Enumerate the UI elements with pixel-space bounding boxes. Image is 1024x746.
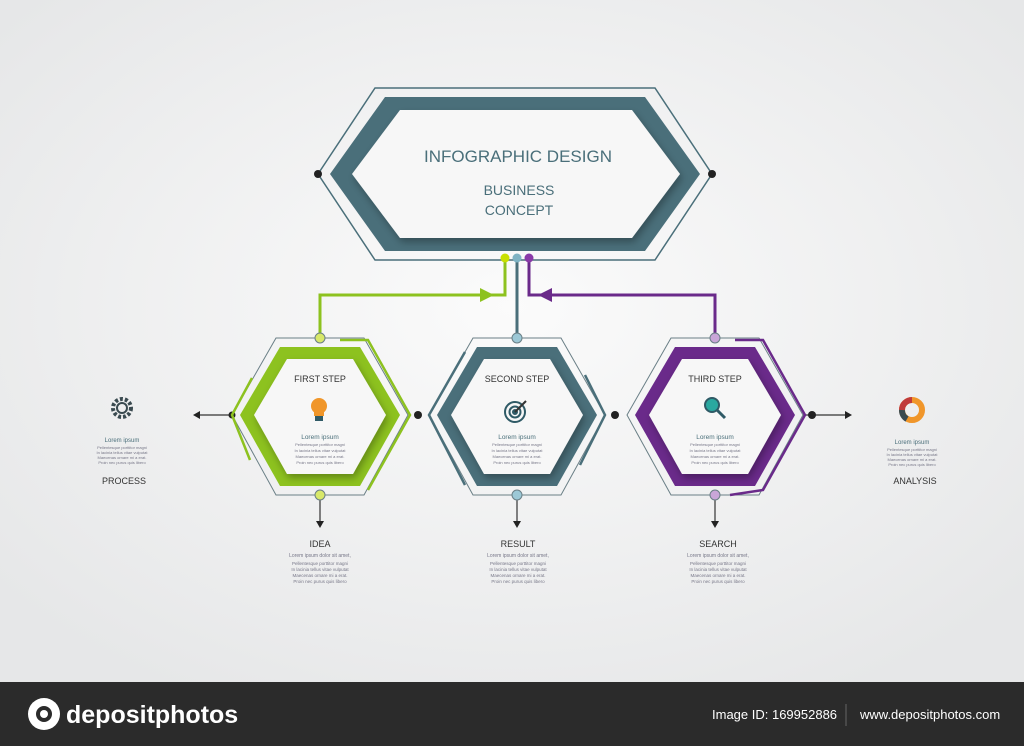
step 1 hexagon: Pellentesque porttitor magni <box>295 442 345 447</box>
bottom labels: Proin nec purus quis libero <box>691 579 745 584</box>
left side: process: In lacinia tellus vitae vulputat <box>97 450 148 455</box>
step 1 hexagon: In lacinia tellus vitae vulputat <box>295 448 346 453</box>
bottom labels: RESULT <box>501 539 536 549</box>
step 1 hexagon: Proin nec purus quis libero <box>296 460 344 465</box>
connector lines from title to steps <box>320 258 715 334</box>
step 3 hexagon: Proin nec purus quis libero <box>691 460 739 465</box>
left side: process: PROCESS <box>102 476 146 486</box>
bottom labels: Maecenas ornare mi a erat. <box>690 573 746 578</box>
step 2 hexagon: Proin nec purus quis libero <box>493 460 541 465</box>
bottom labels: Lorem ipsum dolor sit amet, <box>289 553 351 559</box>
bottom labels: Maecenas ornare mi a erat. <box>490 573 546 578</box>
step 2 hexagon: In lacinia tellus vitae vulputat <box>492 448 543 453</box>
icon: magnifier <box>705 398 725 418</box>
step 3 hexagon: In lacinia tellus vitae vulputat <box>690 448 741 453</box>
step 1 hexagon: FIRST STEP <box>294 374 346 384</box>
bottom labels: In lacinia tellus vitae vulputat <box>689 567 747 572</box>
right side: analysis: Proin nec purus quis libero <box>888 462 936 467</box>
bottom labels: Pellentesque porttitor magni <box>490 561 546 566</box>
bottom labels: Proin nec purus quis libero <box>491 579 545 584</box>
left side: process: Lorem ipsum <box>105 438 139 444</box>
bottom labels: Proin nec purus quis libero <box>293 579 347 584</box>
step 2 hexagon <box>429 333 605 500</box>
icon: target <box>505 401 526 422</box>
bottom labels: In lacinia tellus vitae vulputat <box>291 567 349 572</box>
right side: analysis: Maecenas ornare mi a erat. <box>888 457 936 462</box>
left side: process: Proin nec purus quis libero <box>98 460 146 465</box>
step 3 hexagon: THIRD STEP <box>688 374 742 384</box>
bottom labels: Lorem ipsum dolor sit amet, <box>687 553 749 559</box>
step 2 hexagon: Maecenas ornare mi a erat. <box>493 454 541 459</box>
left side: process: Pellentesque porttitor magni <box>97 445 147 450</box>
step 2 hexagon: SECOND STEP <box>485 374 549 384</box>
step 3 hexagon <box>627 333 805 500</box>
bottom labels: In lacinia tellus vitae vulputat <box>489 567 547 572</box>
footer bar <box>0 682 1024 746</box>
step 1 hexagon <box>232 333 410 500</box>
bottom labels: Pellentesque porttitor magni <box>690 561 746 566</box>
title hexagon <box>314 88 716 262</box>
right side: analysis: In lacinia tellus vitae vulputat <box>887 452 938 457</box>
bottom labels: Maecenas ornare mi a erat. <box>292 573 348 578</box>
bottom labels <box>289 539 749 584</box>
right side: analysis: ANALYSIS <box>893 476 937 486</box>
icon: bulb <box>311 398 327 421</box>
bottom labels: Lorem ipsum dolor sit amet, <box>487 553 549 559</box>
left side: process: Maecenas ornare mi a erat. <box>98 455 146 460</box>
horizontal connectors <box>193 411 852 528</box>
title text: INFOGRAPHIC DESIGN <box>424 147 612 166</box>
bottom labels: IDEA <box>309 539 331 549</box>
left side: process <box>97 399 148 486</box>
bottom labels: SEARCH <box>699 539 737 549</box>
footer bar: Image ID: 169952886 <box>712 707 837 722</box>
right side: analysis: Pellentesque porttitor magni <box>887 447 937 452</box>
step 1 hexagon: Maecenas ornare mi a erat. <box>296 454 344 459</box>
bottom labels: Pellentesque porttitor magni <box>292 561 348 566</box>
step 3 hexagon: Lorem ipsum <box>696 434 734 441</box>
title hexagon: BUSINESS <box>484 182 554 198</box>
step 2 hexagon: Lorem ipsum <box>498 434 536 441</box>
step 3 hexagon: Pellentesque porttitor magni <box>690 442 740 447</box>
title hexagon: CONCEPT <box>485 202 554 218</box>
footer bar: www.depositphotos.com <box>859 707 1000 722</box>
step 2 hexagon: Pellentesque porttitor magni <box>492 442 542 447</box>
footer bar: depositphotos <box>66 701 238 729</box>
step 1 hexagon: Lorem ipsum <box>301 434 339 441</box>
step 3 hexagon: Maecenas ornare mi a erat. <box>691 454 739 459</box>
right side: analysis <box>887 400 938 486</box>
right side: analysis: Lorem ipsum <box>895 440 929 446</box>
